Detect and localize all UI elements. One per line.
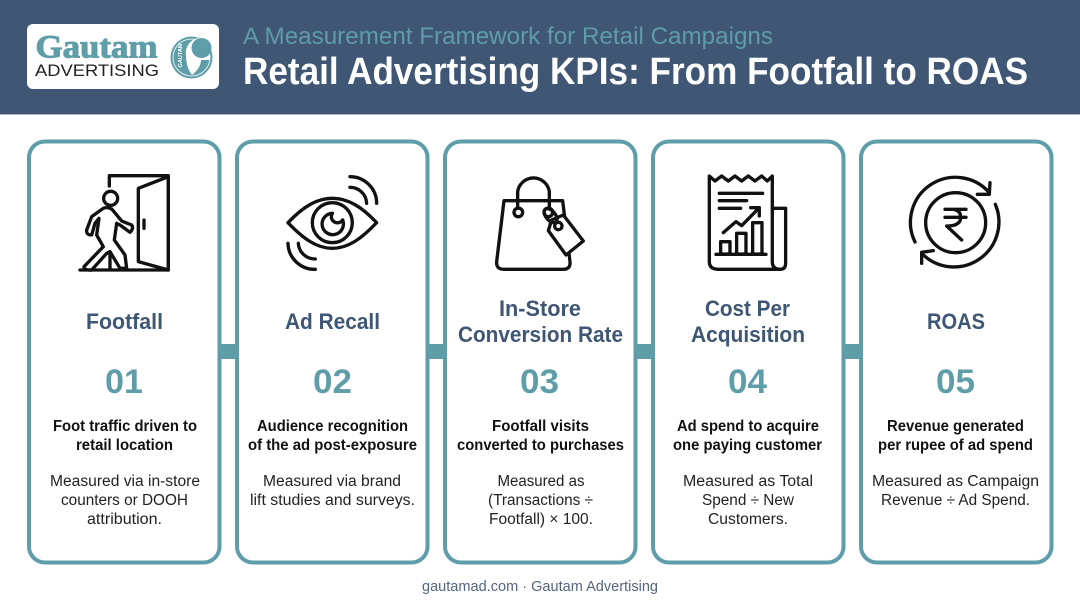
heading: in-store conversion rate: In-Store [499, 296, 581, 321]
connector 4-5 [845, 344, 859, 359]
logo: GAUTAM [178, 43, 184, 68]
key definition: one paying customer [673, 437, 822, 454]
measurement note: Measured as Total [683, 473, 813, 490]
measurement note [872, 473, 1039, 509]
connector 2-3 [429, 344, 443, 359]
key definition: of the ad post-exposure [248, 437, 417, 454]
key definition [457, 418, 624, 454]
icon: shopping bag with tag [497, 178, 583, 269]
measurement note [683, 473, 813, 528]
measurement note: (Transactions ÷ [488, 492, 593, 509]
panel: footfall [29, 142, 220, 562]
measurement note: Measured via in-store [50, 473, 200, 490]
header band [0, 0, 1080, 115]
logo: ADVERTISING [35, 61, 159, 80]
measurement note: Customers. [708, 511, 788, 528]
heading: cost per acquisition: Acquisition [691, 322, 805, 347]
panel: in-store conversion rate [445, 142, 636, 562]
connector 3-4 [637, 344, 651, 359]
key definition: Revenue generated [887, 418, 1024, 435]
key definition: retail location [76, 437, 173, 454]
heading: in-store conversion rate: Conversion Rate [458, 322, 623, 347]
subtitle: A Measurement Framework for Retail Campaigns [243, 23, 773, 50]
measurement note: Footfall) × 100. [489, 511, 593, 528]
measurement note: Spend ÷ New [702, 492, 795, 509]
panel: cost per acquisition [653, 142, 844, 562]
heading: cost per acquisition [691, 296, 805, 347]
icon: report with rising chart [709, 176, 786, 269]
measurement note: Measured as [498, 473, 585, 490]
number 03: 03 [520, 363, 559, 401]
heading: roas: ROAS [927, 309, 985, 334]
logo: Gautam [36, 30, 158, 66]
heading: ad recall: Ad Recall [285, 309, 380, 334]
number 05: 05 [936, 363, 975, 401]
footer: gautamad.com · Gautam Advertising [422, 579, 658, 595]
key definition: per rupee of ad spend [878, 437, 1033, 454]
key definition: Footfall visits [492, 418, 589, 435]
measurement note [488, 473, 593, 528]
key definition [878, 418, 1033, 454]
key definition: converted to purchases [457, 437, 624, 454]
measurement note: Measured as Campaign [872, 473, 1039, 490]
key definition: Foot traffic driven to [53, 418, 197, 435]
measurement note: attribution. [87, 511, 162, 528]
number 02: 02 [313, 363, 352, 401]
measurement note: counters or DOOH [61, 492, 188, 509]
key definition [673, 418, 822, 454]
key definition [53, 418, 197, 454]
measurement note [250, 473, 415, 509]
measurement note [50, 473, 200, 528]
icon: person walking through door [80, 176, 168, 270]
key definition: Ad spend to acquire [677, 418, 819, 435]
icon: rupee with cycle arrows [910, 177, 999, 267]
heading: footfall: Footfall [86, 309, 163, 334]
logo [27, 24, 219, 89]
panel: roas [861, 142, 1052, 562]
title: Retail Advertising KPIs: From Footfall to ROAS [243, 51, 1028, 93]
measurement note: Measured via brand [263, 473, 401, 490]
connector 1-2 [221, 344, 235, 359]
number 01: 01 [105, 363, 143, 401]
key definition [248, 418, 417, 454]
panel: ad recall [237, 142, 428, 562]
measurement note: lift studies and surveys. [250, 492, 415, 509]
measurement note: Revenue ÷ Ad Spend. [881, 492, 1030, 509]
heading: cost per acquisition: Cost Per [705, 296, 790, 321]
key definition: Audience recognition [257, 418, 408, 435]
icon: eye [288, 177, 377, 269]
heading: in-store conversion rate [458, 296, 623, 347]
number 04: 04 [728, 363, 767, 401]
